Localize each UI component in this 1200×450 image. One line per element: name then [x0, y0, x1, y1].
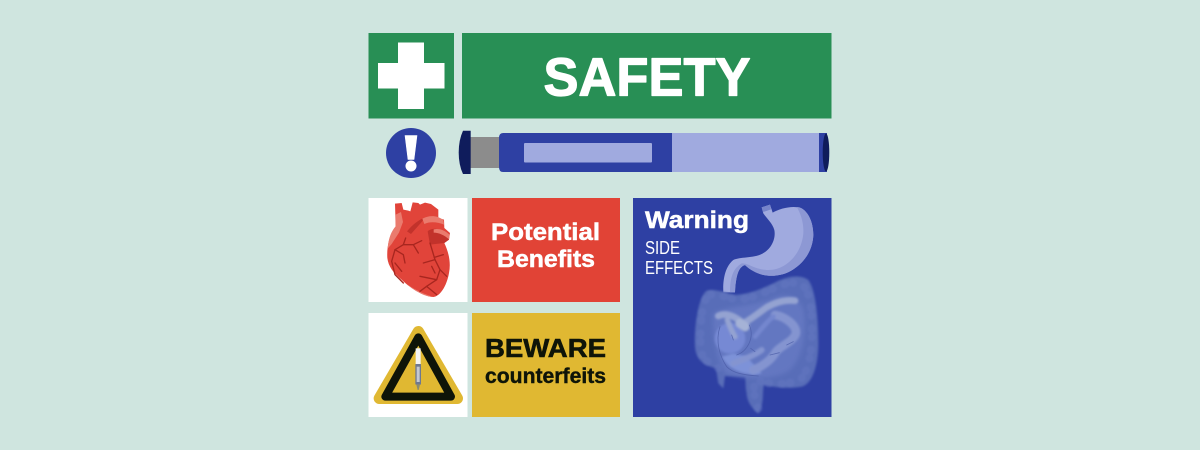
panel: BEWARE counterfeits: counterfeits — [485, 365, 606, 388]
icon: exclamation circle — [386, 128, 436, 178]
panel: warning triangle — [368, 313, 468, 417]
panel: heart — [368, 198, 468, 302]
panel: Warning side effects: Warning — [645, 207, 749, 234]
panel: Warning side effects: SIDE — [645, 238, 680, 258]
icon: injection pen — [459, 131, 829, 174]
panel: BEWARE counterfeits — [472, 313, 620, 417]
title banner: SAFETY — [462, 33, 832, 118]
icon: intestines — [695, 277, 818, 413]
panel: BEWARE counterfeits: BEWARE — [485, 333, 606, 363]
icon: warning triangle with pen — [379, 332, 457, 398]
panel: Potential Benefits: Potential — [491, 219, 600, 246]
panel: Warning side effects: EFFECTS — [645, 258, 713, 278]
panel: Potential Benefits: Benefits — [497, 246, 595, 273]
icon: first aid cross — [368, 33, 454, 118]
icon: stomach — [723, 205, 813, 292]
panel: Warning side effects — [633, 198, 832, 417]
icon: anatomical heart — [387, 202, 450, 297]
panel: Potential Benefits — [472, 198, 620, 302]
title banner: SAFETY: SAFETY — [544, 48, 750, 108]
